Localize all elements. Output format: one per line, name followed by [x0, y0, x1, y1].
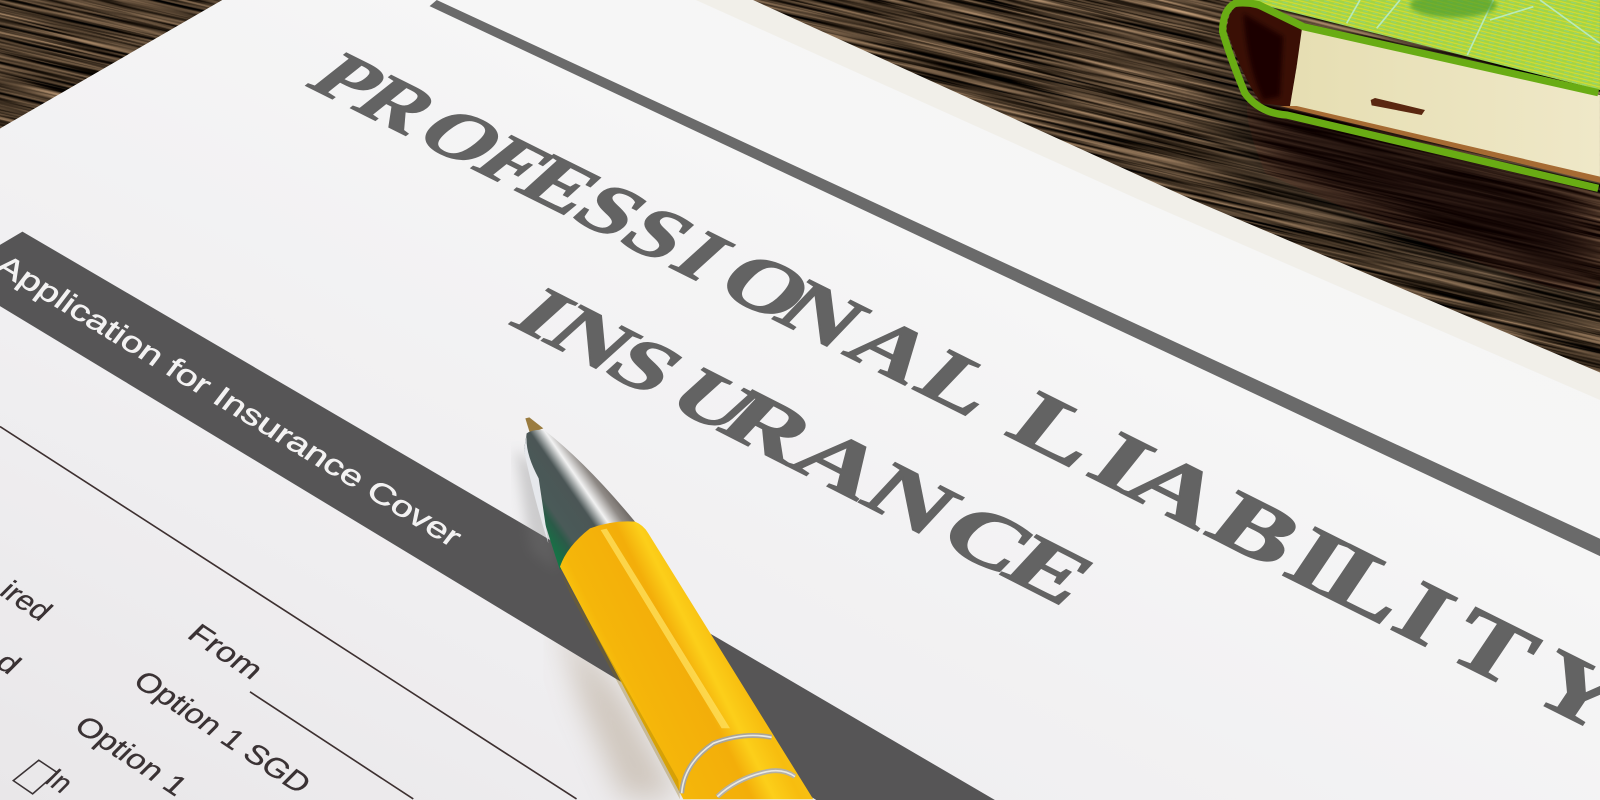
title: Professional Liability Insurance: [290, 41, 1600, 750]
shadow under notebook: [1224, 71, 1600, 306]
page bottom edge: [1280, 106, 1600, 183]
pen shadow on paper: [556, 612, 679, 798]
header rule: [430, 0, 1600, 556]
checkbox: [13, 760, 57, 794]
pen body: [560, 521, 813, 799]
pen ring one: [682, 735, 772, 793]
title word: professional: ESSI: [500, 141, 752, 293]
title word: liability: LIAB: [991, 375, 1321, 584]
from field line: [250, 692, 413, 799]
pen ring two: [717, 771, 795, 797]
field text: Option 1 SGD: Option 1 SGD: [127, 665, 318, 799]
cover leaf veins: [1347, 0, 1600, 55]
pen edge shadow: [560, 570, 680, 799]
title word: insurance: INSU: [493, 274, 780, 447]
pen tip shadow: [515, 449, 556, 571]
pen nose: [524, 430, 635, 570]
page slot mark: [1371, 98, 1425, 115]
band label: Application for Insurance Cover: Application for Insurance Cover: [0, 248, 468, 553]
title word: insurance: RANCE: [702, 376, 1114, 621]
title word: professional: [290, 41, 1021, 431]
section band: [0, 232, 995, 800]
pen highlight: [601, 529, 730, 728]
cover dark patch: [1410, 0, 1497, 18]
title word: liability: [991, 375, 1600, 750]
title word: professional: PROF: [290, 41, 571, 202]
title word: insurance: [493, 274, 1114, 621]
pen tip: [525, 417, 543, 433]
title word: professional: ONAL: [700, 236, 1021, 431]
notebook spine interior: [1227, 5, 1303, 107]
green notebook: [1223, 0, 1600, 188]
notebook green rim: [1223, 3, 1598, 188]
notebook pages: [1290, 28, 1600, 178]
yellow pen: [524, 417, 813, 799]
notebook cover: [1252, 0, 1600, 90]
form fields text: [0, 575, 318, 800]
form divider line: [0, 427, 577, 799]
field text: From: From: [181, 618, 271, 685]
